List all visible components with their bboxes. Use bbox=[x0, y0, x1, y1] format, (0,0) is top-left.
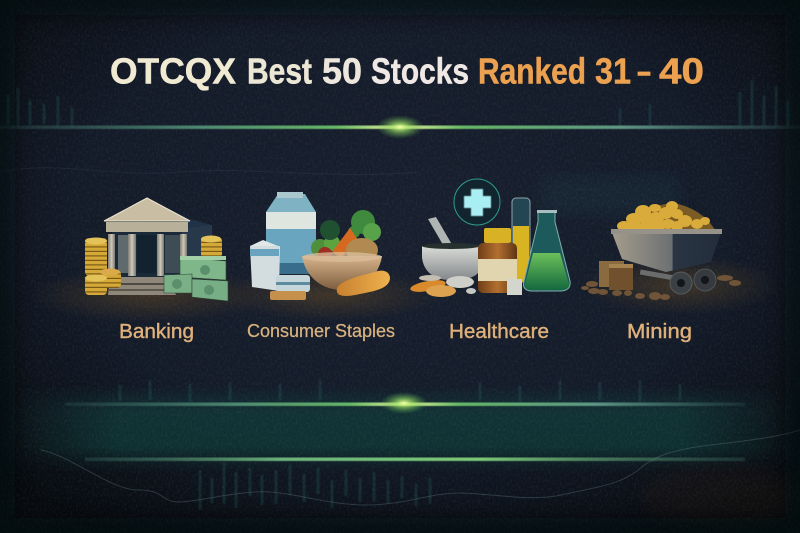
title: 40 bbox=[659, 50, 704, 92]
medical cross badge bbox=[454, 179, 500, 225]
flask bbox=[523, 210, 570, 291]
top glowing divider bbox=[0, 115, 800, 139]
title: Best bbox=[247, 50, 312, 92]
baguette bbox=[337, 271, 390, 296]
title: OTCQX bbox=[110, 50, 236, 92]
vegetables bbox=[311, 210, 381, 262]
icon: mining cart bbox=[581, 201, 741, 300]
title: – bbox=[637, 50, 651, 92]
bowl bbox=[302, 252, 382, 290]
label: Banking: Banking bbox=[119, 321, 194, 343]
pills bbox=[409, 275, 476, 297]
label: Healthcare: Healthcare bbox=[449, 321, 549, 343]
bottom green divider bbox=[85, 458, 745, 461]
title: Stocks bbox=[371, 50, 469, 92]
title: 50 bbox=[322, 50, 362, 92]
rocks bbox=[581, 275, 741, 300]
title: 31 bbox=[595, 50, 631, 92]
medicine bottle bbox=[478, 228, 517, 293]
test tube bbox=[512, 198, 530, 282]
title: Ranked bbox=[478, 50, 586, 92]
title bbox=[110, 50, 704, 92]
label: Consumer Staples: Consumer Staples bbox=[247, 321, 395, 341]
lower glowing divider bbox=[65, 392, 745, 414]
wheels bbox=[640, 269, 716, 294]
cart body bbox=[611, 230, 722, 272]
icon: banking bbox=[85, 198, 228, 301]
cash bundles bbox=[164, 256, 228, 301]
bank building bbox=[104, 198, 212, 295]
mortar and pestle bbox=[422, 217, 480, 280]
icon: healthcare bbox=[409, 179, 570, 297]
milk carton bbox=[266, 192, 316, 274]
small carton and packages bbox=[250, 240, 310, 300]
gold coin stacks bbox=[85, 236, 222, 295]
icon: consumer staples bbox=[250, 192, 390, 300]
label: Mining: Mining bbox=[627, 321, 692, 343]
small box bbox=[507, 279, 522, 295]
gold nuggets bbox=[617, 201, 715, 232]
wooden crates bbox=[599, 261, 633, 290]
